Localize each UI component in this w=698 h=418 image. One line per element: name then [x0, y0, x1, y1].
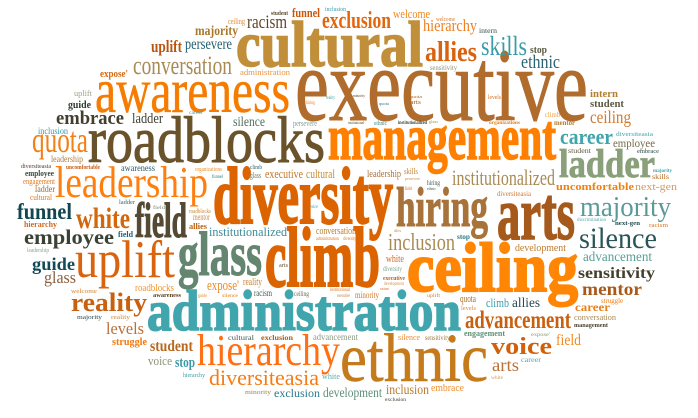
small words: center and right region: mentor: [554, 119, 575, 127]
small words: top region: arts: [410, 100, 422, 106]
small words: top region: ethnic: [521, 52, 560, 73]
small words: top region: uplift: [151, 37, 182, 56]
word: ceiling: ceiling: [407, 230, 578, 307]
small words: top region: expose': [100, 68, 128, 80]
word: hiring: hiring: [396, 177, 488, 239]
small words: bottom region: inclusion: [386, 383, 429, 398]
small words: center and right region: levels: [461, 306, 477, 312]
word: allies: allies: [425, 37, 477, 68]
small words: top region: guide: [68, 99, 91, 111]
word: roadblocks: roadblocks: [88, 104, 325, 177]
word: administration: administration: [147, 280, 461, 343]
small words: left region: guide: [198, 294, 208, 299]
largest word: executive: executive: [295, 28, 588, 143]
small words: top region: quota: [409, 94, 422, 99]
small words: left region: institutionalized: [209, 224, 287, 239]
small words: bottom region: silence: [398, 333, 420, 342]
small words: left region: voice: [309, 205, 319, 210]
small words: bottom region: [77, 290, 581, 403]
word: diversity: diversity: [213, 153, 393, 241]
small words: top region: quota: [379, 101, 389, 106]
small words: top region: persevere: [293, 119, 317, 128]
small words: center and right region: employee: [613, 136, 655, 150]
word: management: management: [328, 102, 556, 174]
small words: center and right region: discrimination: [577, 218, 606, 223]
small words: center and right region: allies: [394, 228, 401, 233]
small words: top region: racism: [247, 12, 287, 33]
word: career: career: [560, 124, 613, 149]
small words: center and right region: development: [515, 242, 566, 254]
word: employee: employee: [24, 225, 114, 249]
small words: top region: hierarchy: [423, 16, 477, 35]
small words: center and right region: next-gen: [615, 221, 641, 227]
word: climb: climb: [265, 211, 380, 305]
small words: top region: intern: [479, 27, 498, 35]
small words: bottom region: student: [150, 338, 194, 355]
small words: bottom region: advancement: [313, 332, 358, 342]
small words: top region: uplift: [74, 89, 93, 98]
small words: center and right region: executive: [383, 276, 405, 282]
small words: top region: stop: [530, 44, 547, 56]
word: mentor: mentor: [582, 279, 642, 299]
word: advancement: advancement: [465, 307, 572, 334]
small words: bottom region: exclusion: [261, 334, 293, 342]
small words: top region: sensitivity: [430, 64, 457, 72]
small words: center and right region: struggle: [601, 297, 623, 305]
word: leadership: leadership: [55, 158, 208, 207]
small words: left region: executive: [265, 166, 303, 181]
small words: left region: ladder: [119, 200, 135, 206]
small words: center and right region: development: [384, 282, 404, 287]
small words: center and right region: climb: [545, 111, 560, 119]
small words: bottom region: white: [491, 376, 504, 381]
small words: top region: [68, 5, 560, 130]
word: glass: glass: [178, 221, 262, 289]
small words: left region: leadership: [51, 154, 83, 164]
word: quota: quota: [32, 120, 88, 160]
small words: left region: roadblocks: [189, 209, 212, 215]
small words: left region: welcome: [71, 289, 97, 295]
word: skills: skills: [481, 31, 527, 61]
word: voice: voice: [491, 334, 552, 360]
small words: bottom region: cultural: [228, 334, 254, 342]
small words: top region: welcome: [436, 17, 455, 23]
word: uplift: uplift: [75, 231, 175, 289]
small words: top region: funnel: [292, 5, 320, 20]
small words: center and right region: management: [574, 323, 608, 329]
small words: center and right region: leadership: [367, 169, 401, 180]
small words: top region: minority: [353, 93, 365, 98]
small words: top region: welcome: [393, 6, 430, 21]
word: funnel: funnel: [17, 199, 72, 224]
small words: bottom region: reality: [111, 315, 130, 321]
small words: center and right region: majority: [653, 169, 673, 174]
small words: left region: arts: [279, 263, 289, 269]
small words: left region: ceiling: [294, 290, 309, 298]
small words: left region: field: [153, 206, 166, 211]
small words: top region: organizations: [489, 121, 520, 126]
small words: bottom region: voice: [148, 353, 172, 368]
small words: bottom region: stop: [175, 355, 195, 371]
small words: center and right region: embrace: [637, 149, 659, 155]
word: diversiteasia: diversiteasia: [209, 365, 319, 390]
small words: left region: diversiteasia: [21, 164, 51, 170]
small words: top region: glass: [429, 119, 438, 124]
small words: center and right region: career: [575, 300, 611, 314]
small words: top region: ladder: [132, 111, 163, 127]
small words: bottom region: exclusion: [385, 398, 407, 403]
word: awareness: awareness: [95, 56, 290, 126]
small words: center and right region: hiring: [427, 179, 440, 187]
small words: center and right region: uplift: [427, 294, 441, 299]
word: institutionalized: institutionalized: [452, 165, 555, 190]
small words: center and right region: student: [568, 147, 591, 155]
small words: left region: glass: [250, 171, 261, 180]
word: conversation: conversation: [133, 51, 232, 80]
small words: center and right region: conversation: [574, 313, 616, 322]
small words: left region: roadblocks: [135, 282, 174, 294]
word: arts: arts: [497, 173, 575, 256]
word: exclusion: exclusion: [322, 8, 391, 34]
word: reality: reality: [71, 288, 147, 317]
word: ladder: ladder: [559, 141, 655, 186]
small words: center and right region: racism: [380, 286, 390, 291]
small words: top region: administration: [240, 68, 290, 77]
small words: left region: ladder: [35, 184, 55, 194]
small words: bottom region: minority: [245, 390, 271, 396]
small words: center and right region: intern: [590, 88, 618, 100]
small words: bottom region: majority: [77, 315, 102, 321]
small words: center and right region: racism: [649, 223, 668, 229]
small words: center and right region: ethnic: [427, 186, 436, 191]
small words: left region: reality: [243, 277, 262, 288]
small words: top region: ethnic: [374, 121, 387, 127]
small words: bottom region: arts: [492, 355, 519, 375]
small words: top region: persevere: [185, 36, 232, 53]
small words: center and right region: ceiling: [590, 107, 631, 127]
small words: left region: expose': [207, 278, 239, 294]
small words: left region: hierarchy: [24, 220, 57, 229]
small words: center and right region: persevere: [405, 176, 420, 181]
small words: left region: cultural: [306, 166, 335, 181]
small words: center and right region: [367, 88, 678, 329]
small words: left region: racism: [254, 288, 272, 298]
small words: top region: levels: [488, 95, 502, 101]
small words: top region: inclusion: [325, 7, 346, 13]
small words: left region: field: [118, 230, 134, 239]
small words: center and right region: quota: [460, 294, 476, 305]
small words: bottom region: embrace: [431, 383, 465, 394]
small words: left region: engagement: [23, 177, 56, 186]
small words: center and right region: diversity: [383, 265, 402, 273]
small words: top region: student: [271, 11, 288, 17]
small words: center and right region: uncomfortable: [556, 181, 634, 193]
small words: center and right region: next-gen: [635, 181, 678, 193]
small words: top region: career: [189, 111, 203, 116]
small words: bottom region: hierarchy: [183, 373, 205, 379]
word: sensitivity: sensitivity: [578, 265, 655, 282]
small words: left region: employee: [25, 169, 54, 178]
small words: left region: climb: [250, 165, 262, 171]
small words: bottom region: exclusion: [274, 386, 320, 400]
small words: bottom region: field: [556, 332, 581, 349]
small words: bottom region: career: [521, 356, 542, 364]
small words: left region: administration: [316, 237, 339, 242]
small words: bottom region: engagement: [464, 329, 505, 338]
small words: center and right region: field: [405, 187, 412, 192]
small words: center and right region: advancement: [583, 250, 652, 265]
small words: top region: institutionalized: [398, 121, 427, 126]
word: guide: guide: [32, 254, 75, 274]
word: white: white: [76, 202, 130, 235]
small words: bottom region: expose': [531, 333, 550, 338]
small words: left region: funnel: [212, 175, 224, 180]
small words: left region: cultural: [30, 193, 53, 202]
small words: center and right region: skills: [404, 167, 418, 176]
small words: left region: conversation: [316, 226, 356, 237]
small words: left region: allies: [189, 222, 207, 231]
word: cultural: cultural: [236, 9, 423, 81]
word: majority: majority: [580, 192, 671, 223]
small words: left region: diversity: [343, 237, 356, 242]
small words: center and right region: diversiteasia: [497, 190, 532, 198]
small words: left region: executive: [337, 294, 351, 299]
small words: bottom region: white: [322, 372, 340, 381]
small words: center and right region: diversiteasia: [616, 132, 653, 138]
small words: bottom region: minority: [355, 290, 379, 300]
small words: top region: institutional: [348, 120, 365, 125]
word: hierarchy: hierarchy: [197, 326, 340, 375]
word: silence: silence: [579, 222, 657, 255]
small words: left region: mentor: [193, 212, 210, 222]
small words: left region: uncomfortable: [66, 165, 100, 171]
small words: left region: [21, 126, 356, 299]
small words: left region: leadership: [27, 248, 49, 254]
small words: top region: reality: [326, 96, 335, 101]
small words: left region: organizations: [195, 167, 223, 173]
small words: left region: awareness: [153, 293, 182, 299]
small words: center and right region: climb: [486, 295, 509, 310]
small words: left region: institutional: [330, 288, 351, 293]
small words: center and right region: skills: [652, 173, 669, 181]
small words: bottom region: sensitivity: [425, 334, 450, 342]
word: field: field: [135, 192, 187, 248]
small words: top region: hiring: [306, 101, 315, 106]
small words: bottom region: struggle: [112, 337, 148, 348]
small words: left region: inclusion: [38, 126, 68, 136]
small words: left region: awareness: [121, 163, 155, 173]
small words: center and right region: allies: [512, 296, 540, 311]
small words: left region: glass: [44, 268, 76, 287]
small words: left region: silence: [222, 294, 239, 299]
small words: bottom region: development: [323, 386, 382, 401]
small words: center and right region: stop: [457, 233, 470, 241]
small words: top region: majority: [195, 24, 238, 39]
small words: top region: ceiling: [228, 17, 245, 26]
small words: top region: silence: [233, 115, 265, 130]
small words: center and right region: white: [386, 254, 404, 265]
small words: bottom region: levels: [106, 319, 144, 338]
small words: center and right region: student: [590, 98, 624, 110]
word: inclusion: inclusion: [388, 230, 455, 256]
word: ethnic: ethnic: [340, 320, 488, 396]
word: embrace: embrace: [56, 108, 124, 129]
